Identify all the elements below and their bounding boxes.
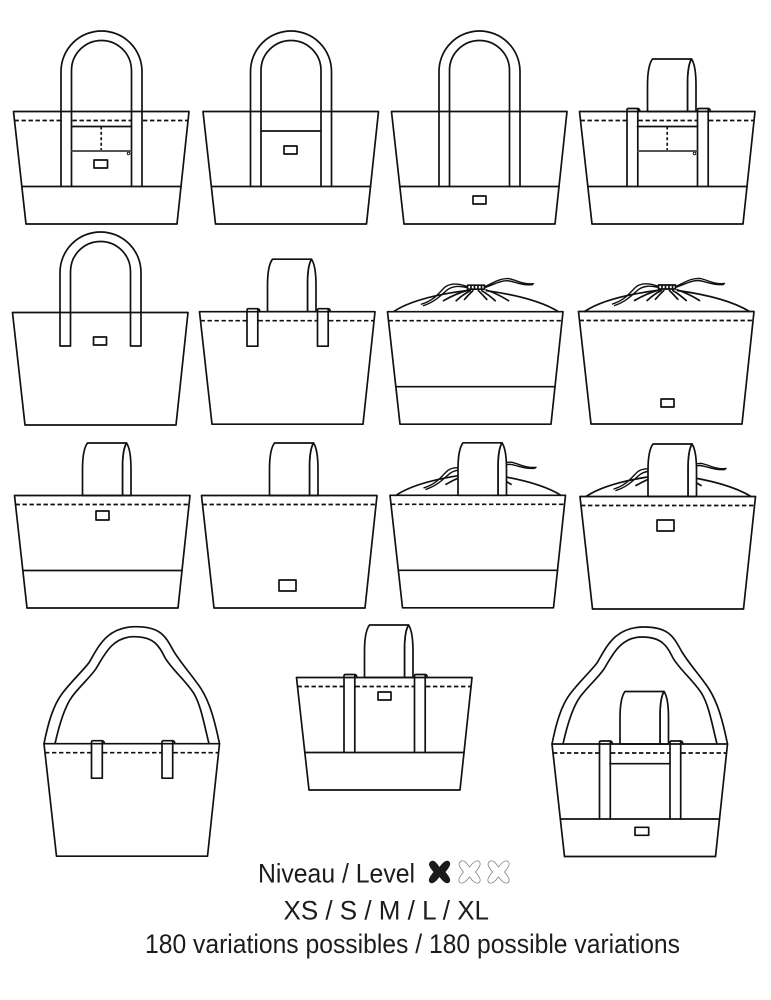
- bag 10: short handle, large base label: [202, 443, 377, 608]
- bag 12: drawstring, short handle, large label: [580, 444, 756, 609]
- bag 15: curved strap, short handle, straps, pocket, base label: [552, 627, 728, 856]
- bag 5: long handles with short tabs: [12, 232, 188, 425]
- bag 4: short handle, straps, zip pocket: [580, 59, 755, 224]
- level heading: Niveau / Level: [258, 858, 415, 888]
- bag 1: long handles, zip pocket, contrast base: [14, 31, 189, 224]
- bag 11: drawstring and short handle with contrast base: [390, 443, 566, 608]
- bag 13: curved shoulder strap with tabs: [44, 627, 220, 856]
- sizes: XS / S / M / L / XL: [284, 896, 489, 926]
- icon: empty level cross: [488, 861, 509, 883]
- bag 2: long handles, plain pocket: [203, 31, 378, 224]
- bag 8: drawstring closure with base label: [578, 278, 754, 424]
- bag 6: short handle with tabs and top stitching: [200, 259, 375, 424]
- bag 7: drawstring closure with contrast base: [388, 279, 563, 424]
- bag 3: long handles, base label: [392, 31, 567, 224]
- icon: filled level cross: [429, 861, 450, 883]
- icon: empty level cross: [459, 861, 480, 883]
- variations count: 180 variations possibles / 180 possible variations: [145, 929, 680, 959]
- bag 9: short handle, label, contrast base: [14, 443, 190, 608]
- bag 14: short handle, straps, label, contrast base: [296, 625, 472, 790]
